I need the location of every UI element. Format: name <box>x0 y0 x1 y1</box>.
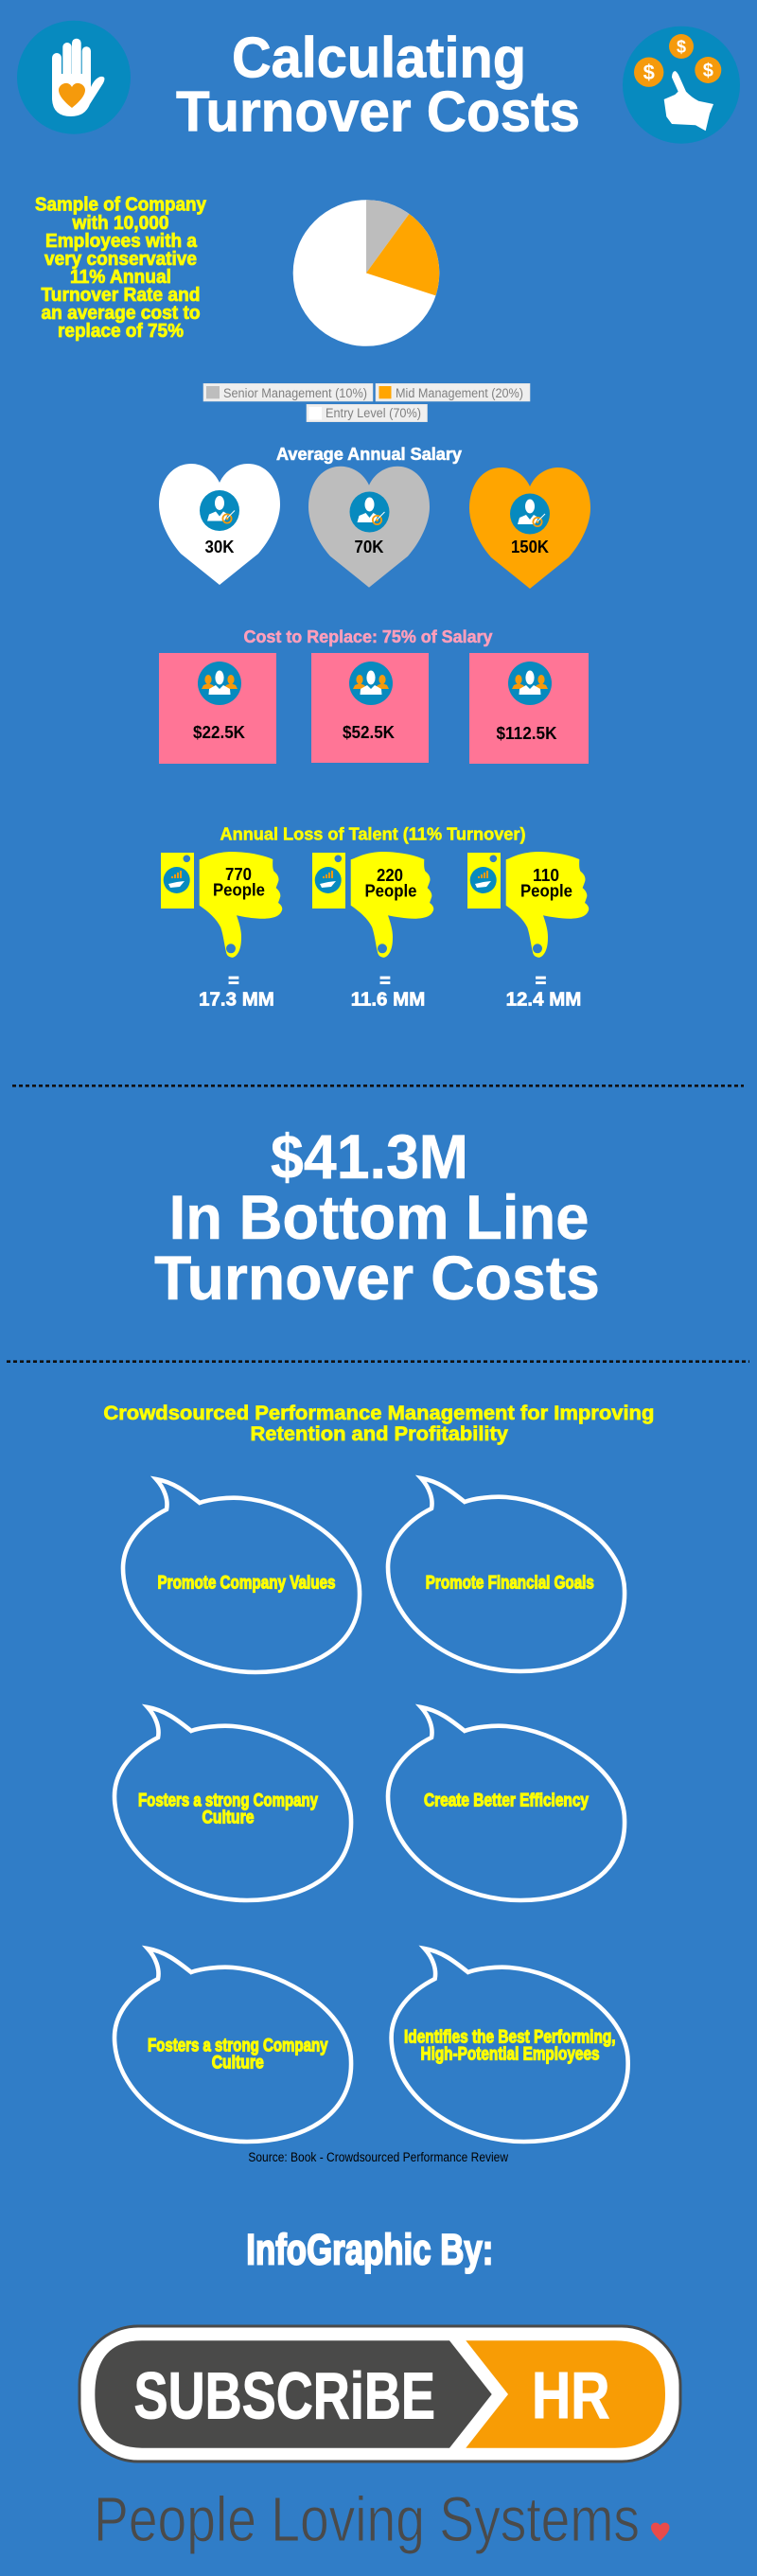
thumbs down: 220 people <box>312 852 433 958</box>
speech bubble: fosters company culture: Culture <box>202 1808 255 1828</box>
thumbs down: 770 people: People <box>213 881 265 900</box>
speech bubble: fosters company culture: Fosters a strong Company <box>138 1790 318 1810</box>
speech bubble: fosters company culture second: Fosters a strong Company <box>148 2036 328 2056</box>
speech bubble: identifies best performing: High-Potential Employees <box>420 2044 600 2065</box>
panel: cost 112.5K <box>469 653 589 764</box>
text block: sample company: with 10,000 <box>72 213 168 234</box>
heading: crowdsourced performance management <box>103 1402 654 1445</box>
figure: 12.4 MM <box>506 971 581 1010</box>
figure: 17.3 MM: = <box>228 971 239 992</box>
headline: total cost: Turnover Costs <box>154 1243 600 1313</box>
icon: thumbs up with dollar coins: $ <box>677 38 686 57</box>
thumbs down: 110 people: 110 <box>533 866 559 885</box>
speech bubble: identifies best performing: Identifies the Best Performing, <box>404 2026 616 2047</box>
headline: total cost <box>154 1121 600 1313</box>
speech bubble: fosters company culture <box>114 1707 351 1900</box>
text block: sample company <box>35 195 207 342</box>
speech bubble: promote company values: Promote Company Values <box>157 1572 336 1593</box>
speech bubble: fosters company culture second <box>114 1949 351 2142</box>
speech bubble: promote company values <box>123 1479 360 1672</box>
figure: 17.3 MM: 17.3 MM <box>199 988 274 1010</box>
icon: thumbs up with dollar coins <box>623 26 740 144</box>
heart: mid salary <box>469 468 590 589</box>
speech bubble: create better efficiency <box>388 1707 625 1900</box>
panel: cost 22.5K <box>159 653 276 764</box>
heading: crowdsourced performance management: Retention and Profitability <box>250 1422 508 1445</box>
title: Calculating <box>232 26 526 90</box>
thumbs down: 220 people: 220 <box>377 866 403 885</box>
speech bubble: fosters company culture second: Culture <box>212 2053 264 2073</box>
tagline: people loving systems: People Loving Systems <box>94 2484 640 2555</box>
icon: red heart <box>651 2523 670 2541</box>
legend <box>203 383 530 422</box>
heading: infographic by: InfoGraphic By: <box>246 2225 493 2273</box>
panel: cost 112.5K: $112.5K <box>496 724 556 743</box>
legend: Mid Management (20%) <box>396 386 523 400</box>
figure: 17.3 MM <box>199 971 274 1010</box>
legend: Senior Management (10%) <box>223 386 367 400</box>
pie chart <box>293 200 439 346</box>
speech bubble: create better efficiency: Create Better Efficiency <box>424 1790 589 1810</box>
figure: 11.6 MM: 11.6 MM <box>351 988 425 1010</box>
thumbs down: 110 people: People <box>520 882 572 901</box>
panel: cost 52.5K: $52.5K <box>343 723 395 742</box>
heading: annual loss of talent: Annual Loss of Talent (11% Turnover) <box>220 824 526 843</box>
text block: sample company: 11% Annual <box>70 267 171 288</box>
text block: sample company: Employees with a <box>45 231 198 252</box>
icon: thumbs up with dollar coins: $ <box>703 61 713 81</box>
text block: sample company: Turnover Rate and <box>42 285 201 306</box>
speech bubble: identifies best performing <box>392 1949 628 2142</box>
title: Turnover Costs <box>176 79 580 143</box>
text block: sample company: Sample of Company <box>35 195 207 216</box>
title <box>176 26 580 143</box>
heart: senior salary: 70K <box>354 538 384 556</box>
thumbs down: 110 people <box>467 852 589 958</box>
speech bubble: promote financial goals <box>388 1478 625 1671</box>
heading: cost to replace: Cost to Replace: 75% of Salary <box>244 627 492 646</box>
logo: subscribe hr: SUBSCRiBE <box>134 2359 435 2433</box>
logo: subscribe hr <box>79 2326 680 2461</box>
panel: cost 22.5K: $22.5K <box>193 723 245 742</box>
heading: crowdsourced performance management: Crowdsourced Performance Management for Improving <box>103 1402 654 1424</box>
heart: entry level salary: 30K <box>204 538 235 556</box>
text block: sample company: replace of 75% <box>58 321 184 342</box>
legend: Entry Level (70%) <box>326 406 421 420</box>
figure: 12.4 MM: 12.4 MM <box>506 988 581 1010</box>
figure: 11.6 MM: = <box>379 971 391 992</box>
headline: total cost: In Bottom Line <box>169 1182 590 1252</box>
speech bubble: promote financial goals: Promote Financial Goals <box>426 1572 594 1593</box>
text block: sample company: very conservative <box>44 249 197 270</box>
heart: entry level salary <box>159 464 280 585</box>
panel: cost 52.5K <box>311 653 429 763</box>
heart: mid salary: 150K <box>511 538 549 556</box>
icon: hand with heart <box>17 21 131 134</box>
thumbs down: 770 people <box>161 852 282 958</box>
figure: 11.6 MM <box>351 971 425 1010</box>
thumbs down: 770 people: 770 <box>225 865 252 884</box>
source note: Source: Book - Crowdsourced Performance Review <box>248 2150 508 2164</box>
thumbs down: 220 people: People <box>365 882 416 901</box>
text block: sample company: an average cost to <box>42 303 201 324</box>
headline: total cost: $41.3M <box>271 1121 468 1191</box>
heart: senior salary <box>308 467 430 588</box>
logo: subscribe hr: HR <box>532 2358 609 2432</box>
figure: 12.4 MM: = <box>536 971 546 992</box>
icon: thumbs up with dollar coins: $ <box>643 61 655 84</box>
heading: average annual salary: Average Annual Salary <box>276 445 462 464</box>
